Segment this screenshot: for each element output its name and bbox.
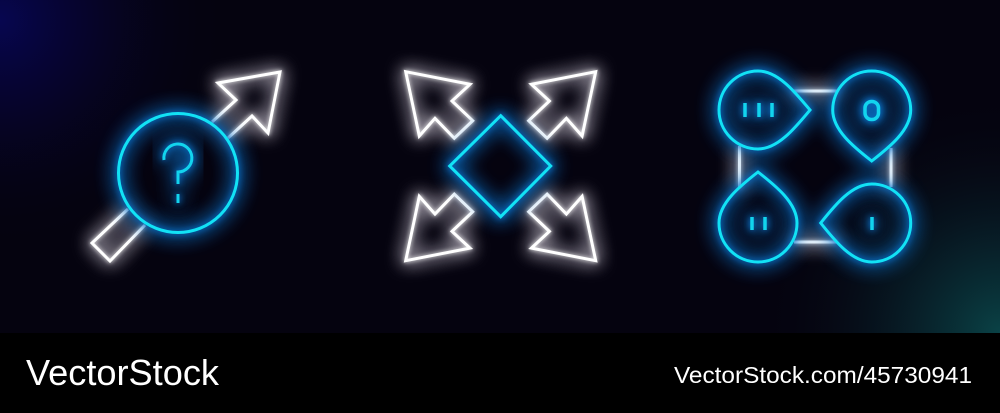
white arrow <box>92 72 280 261</box>
image id url: VectorStock.com/45730941 <box>674 362 972 388</box>
icon: four numbered drop pins on square <box>719 71 911 262</box>
numerals <box>745 102 878 230</box>
cyan diamond <box>450 116 551 217</box>
bottom black band <box>0 333 1000 413</box>
drop pins <box>719 71 911 262</box>
brand name: VectorStock <box>26 352 220 393</box>
cyan circle <box>118 114 238 232</box>
white square <box>740 91 891 242</box>
four white arrows <box>406 72 596 261</box>
question mark <box>164 144 192 203</box>
icon: four arrows around diamond <box>406 72 596 261</box>
icon: arrow with question mark in circle <box>92 72 280 261</box>
